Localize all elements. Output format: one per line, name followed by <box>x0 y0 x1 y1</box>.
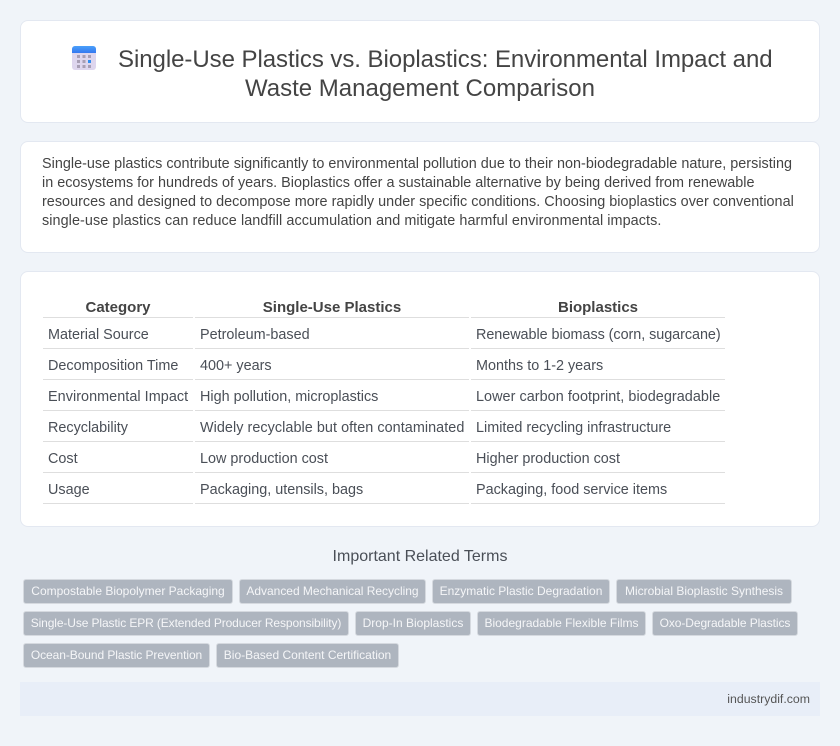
panel: introduction <box>20 141 820 253</box>
panel: comparison table: Lower carbon footprint, biodegradable <box>476 389 720 405</box>
table header: Category <box>85 299 151 316</box>
intro text: in ecosystems for hundreds of years. Bioplastics offer a sustainable alternative by being derived from renewable <box>42 175 754 191</box>
panel: comparison table: Single-Use Plastics <box>263 299 401 316</box>
panel: comparison table: 400+ years <box>200 358 272 374</box>
row: environmental impact: Environmental Impact <box>48 389 188 405</box>
row: cost: Cost <box>48 451 78 467</box>
intro text <box>42 156 794 229</box>
related term tags: Biodegradable Flexible Films <box>484 616 639 630</box>
panel: comparison table: Packaging, food service items <box>476 482 667 498</box>
related term tags <box>23 579 798 668</box>
related term tags: Enzymatic Plastic Degradation <box>440 584 602 598</box>
related term tags: Compostable Biopolymer Packaging <box>31 584 225 598</box>
related term tags: Single-Use Plastic EPR (Extended Producer Responsibility) <box>31 616 341 630</box>
row: material source: Material Source <box>48 327 149 343</box>
related terms heading: Important Related Terms <box>333 548 507 565</box>
panel: comparison table: High pollution, microplastics <box>200 389 378 405</box>
panel: comparison table: Petroleum-based <box>200 327 310 343</box>
intro text: resources and designed to decompose more rapidly under specific conditions. Choosing bioplastics over conventional <box>42 194 794 210</box>
panel: comparison table: Limited recycling infrastructure <box>476 420 671 436</box>
related term tags: Advanced Mechanical Recycling <box>246 584 419 598</box>
intro text: single-use plastics can reduce landfill accumulation and mitigate harmful environmental impacts. <box>42 213 661 229</box>
related term tags: Drop-In Bioplastics <box>363 616 463 630</box>
title: Waste Management Comparison <box>245 75 595 102</box>
icon: calendar <box>72 46 96 70</box>
title: Single-Use Plastics vs. Bioplastics: Environmental Impact and <box>118 46 773 73</box>
footer source: industrydif.com <box>727 692 810 706</box>
footer bar <box>20 682 820 716</box>
row: recyclability: Recyclability <box>48 420 128 436</box>
related term tags: Oxo-Degradable Plastics <box>660 616 790 630</box>
header card <box>20 20 820 123</box>
panel: comparison table: Bioplastics <box>558 299 638 316</box>
panel: comparison table: Low production cost <box>200 451 328 467</box>
panel: comparison table: Months to 1-2 years <box>476 358 603 374</box>
panel: comparison table: Higher production cost <box>476 451 620 467</box>
panel: comparison table: Packaging, utensils, bags <box>200 482 363 498</box>
row: usage: Usage <box>48 482 90 498</box>
intro text: Single-use plastics contribute significantly to environmental pollution due to their non-biodegradable nature, persisting <box>42 156 792 172</box>
related term tags: Ocean-Bound Plastic Prevention <box>31 648 202 662</box>
related term tags: Microbial Bioplastic Synthesis <box>625 584 783 598</box>
panel: comparison table <box>20 271 820 527</box>
title <box>118 46 773 102</box>
panel: comparison table: Renewable biomass (corn, sugarcane) <box>476 327 721 343</box>
row: decomposition time: Decomposition Time <box>48 358 178 374</box>
related term tags: Bio-Based Content Certification <box>224 648 391 662</box>
panel: comparison table: Widely recyclable but often contaminated <box>200 420 464 436</box>
